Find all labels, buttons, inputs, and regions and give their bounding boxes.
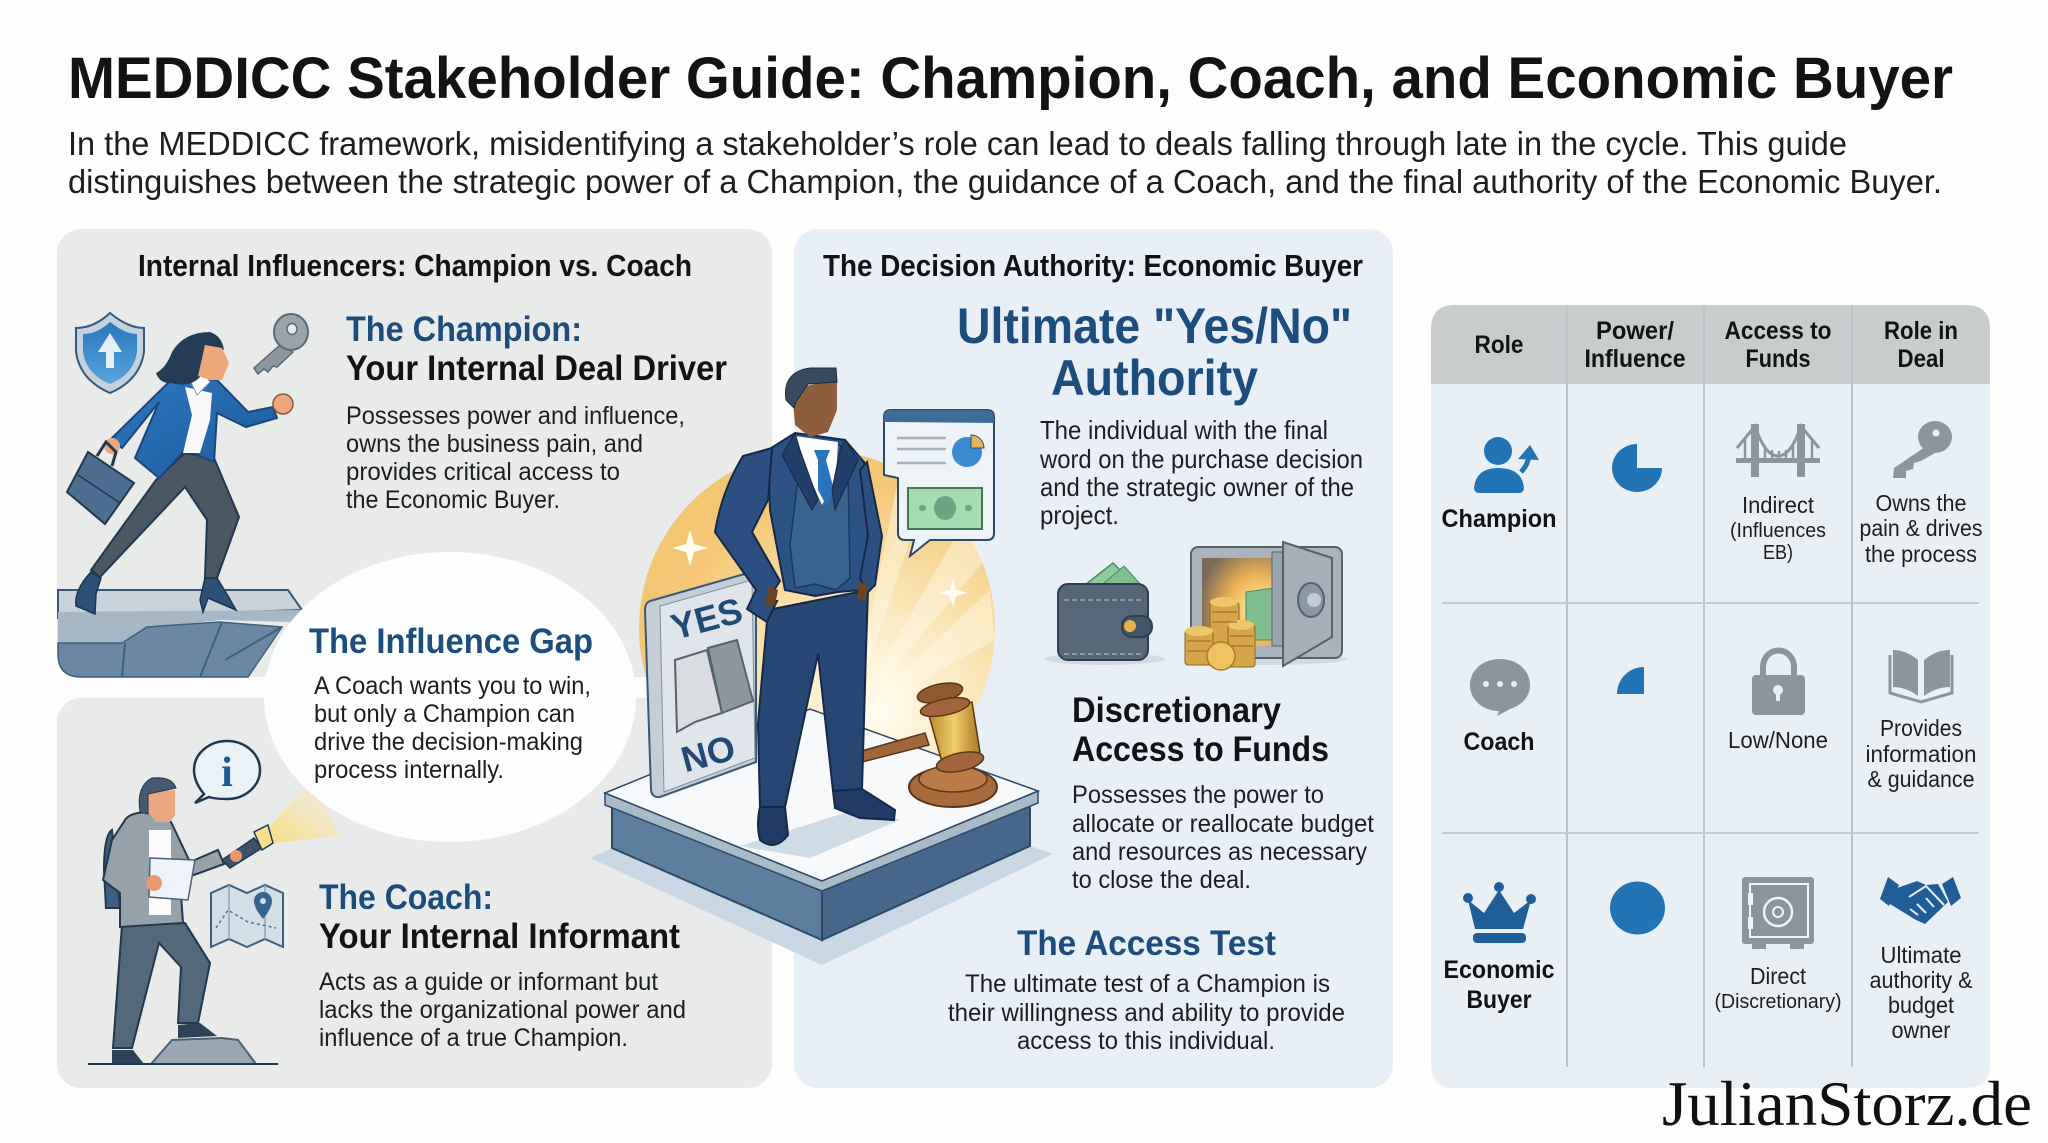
text: provides information: & guidance xyxy=(1868,766,1974,792)
icon: map with pin xyxy=(211,885,283,947)
text: influence gap description xyxy=(314,672,591,784)
icon: champion person with arrow xyxy=(1474,437,1539,493)
text: champion description: owns the business pain, and xyxy=(346,430,643,458)
heading: ultimate authority xyxy=(957,298,1352,406)
icon: key xyxy=(254,314,308,374)
intro text xyxy=(68,125,1942,200)
icon: padlock xyxy=(1752,650,1805,715)
heading: influence gap: The Influence Gap xyxy=(309,622,593,661)
text: champion description: provides critical access to xyxy=(346,458,620,486)
icon: safe xyxy=(1742,877,1814,949)
text: ultimate authority: authority & xyxy=(1870,967,1972,993)
icon: shield with arrow xyxy=(76,313,144,393)
text: coach description: influence of a true Champion. xyxy=(319,1024,628,1052)
yes/no switch panel: YES xyxy=(667,589,747,648)
icon: coach chat bubble xyxy=(1470,659,1530,716)
text: provides information xyxy=(1866,715,1976,792)
text: owns the pain xyxy=(1860,490,1982,567)
text: access test description: access to this individual. xyxy=(1017,1027,1275,1055)
illustration: coach figure xyxy=(103,778,273,1064)
icon: bridge xyxy=(1736,424,1820,477)
text: authority description: word on the purchase decision xyxy=(1039,444,1363,474)
text: champion description: Possesses power and influence, xyxy=(346,402,685,430)
intro text: In the MEDDICC framework, misidentifying a stakeholder’s role can lead to deals falling through late in the cycle. This guide xyxy=(68,125,1847,162)
illustration: economic buyer on platform xyxy=(590,368,1053,965)
table body xyxy=(1431,384,1990,1088)
text: owns the pain: pain & drives xyxy=(1860,515,1982,541)
table header: Access to xyxy=(1724,317,1832,345)
role label: champion: Champion xyxy=(1442,505,1556,533)
text: influence gap description: drive the decision-making xyxy=(314,728,583,756)
ground line xyxy=(88,1063,278,1065)
text: champion description: the Economic Buyer. xyxy=(346,486,560,514)
text: influence gap description: but only a Champion can xyxy=(314,700,575,728)
table header: Role in xyxy=(1884,317,1958,345)
text: funds description xyxy=(1072,781,1374,894)
text: owns the pain: Owns the xyxy=(1876,490,1966,516)
text: provides information: Provides xyxy=(1880,715,1962,741)
text: ultimate authority: Ultimate xyxy=(1880,942,1962,968)
text: influence gap description: A Coach wants you to win, xyxy=(314,672,591,700)
panel heading: internal influencers: Internal Influencers: Champion vs. Coach xyxy=(138,248,692,283)
illustration: cliff ledge xyxy=(58,590,302,677)
text: access test description: The ultimate test of a Champion is xyxy=(965,970,1330,998)
text: champion description xyxy=(346,402,685,514)
watermark: JulianStorz.de xyxy=(1662,1068,2032,1139)
text: ultimate authority: owner xyxy=(1892,1017,1951,1043)
text: direct xyxy=(1714,963,1842,1013)
chart: quarter pie xyxy=(1617,667,1644,694)
heading: the champion: Your Internal Deal Driver xyxy=(346,349,727,388)
text: ultimate authority: budget xyxy=(1888,992,1955,1018)
text: provides information: information xyxy=(1866,741,1976,767)
text: indirect: (Influences xyxy=(1730,520,1826,542)
text: indirect xyxy=(1730,492,1826,564)
heading: the coach xyxy=(319,878,680,956)
heading: the champion xyxy=(346,310,727,388)
role label: coach: Coach xyxy=(1464,728,1534,756)
heading: the champion: The Champion: xyxy=(346,310,582,349)
text: authority description: and the strategic owner of the xyxy=(1040,472,1354,502)
platform xyxy=(590,709,1053,965)
table header: Power/ xyxy=(1596,317,1674,345)
heading: discretionary access xyxy=(1072,691,1329,769)
icon: key xyxy=(1893,421,1952,478)
heading: discretionary access: Access to Funds xyxy=(1072,730,1329,769)
yes/no switch panel: NO xyxy=(677,727,740,780)
text: authority description: The individual with the final xyxy=(1040,415,1328,445)
role label: economic buyer xyxy=(1444,956,1555,1014)
text: funds description: allocate or reallocate budget xyxy=(1072,810,1374,838)
icon: open book xyxy=(1890,650,1952,702)
text: low/none: Low/None xyxy=(1728,727,1828,753)
heading: discretionary access: Discretionary xyxy=(1072,691,1281,730)
right arm xyxy=(860,462,882,593)
icon: wallet xyxy=(1045,563,1165,665)
table header: Influence xyxy=(1584,345,1686,373)
yes/no switch panel xyxy=(645,573,756,797)
text: funds description: to close the deal. xyxy=(1072,866,1251,894)
heading: ultimate authority: Ultimate "Yes/No" xyxy=(957,298,1352,354)
text: access test description xyxy=(948,970,1345,1055)
text: coach description: lacks the organizational power and xyxy=(319,996,686,1024)
panel: coach xyxy=(57,698,772,1088)
text: coach description: Acts as a guide or informant but xyxy=(319,968,658,996)
table header xyxy=(1431,305,1990,384)
text: indirect: EB) xyxy=(1763,542,1793,564)
text: direct: (Discretionary) xyxy=(1714,991,1842,1013)
role label: economic buyer: Economic xyxy=(1444,956,1555,984)
intro text: distinguishes between the strategic power of a Champion, the guidance of a Coach, and the final authority of the Economic Buyer. xyxy=(68,163,1942,200)
text: indirect: Indirect xyxy=(1742,492,1815,518)
chart: full circle xyxy=(1610,882,1665,934)
icon: open safe with coins xyxy=(1183,542,1347,670)
jacket torso xyxy=(768,433,868,596)
text: access test description: their willingness and ability to provide xyxy=(948,999,1345,1027)
text: ultimate authority xyxy=(1870,942,1972,1043)
text: coach description xyxy=(319,968,686,1052)
heading: the coach: The Coach: xyxy=(319,878,493,917)
icon: report speech card xyxy=(884,410,994,556)
left arm akimbo xyxy=(715,448,780,622)
icon: info speech bubble: i xyxy=(221,750,233,796)
golden glow xyxy=(639,450,995,806)
text: authority description xyxy=(1039,415,1363,530)
text: owns the pain: the process xyxy=(1865,541,1977,567)
flashlight beam xyxy=(270,780,340,843)
panel: decision authority xyxy=(794,229,1393,1088)
panel: champion xyxy=(57,229,772,677)
heading: ultimate authority: Authority xyxy=(1051,350,1258,406)
chart: three-quarter pie xyxy=(1612,444,1662,492)
heading: the access test: The Access Test xyxy=(1017,924,1276,963)
illustration: champion figure xyxy=(67,332,293,614)
title: MEDDICC Stakeholder Guide: Champion, Coach, and Economic Buyer xyxy=(68,46,1953,111)
callout: the influence gap xyxy=(264,552,636,842)
text: funds description: and resources as necessary xyxy=(1072,838,1367,866)
heading: the coach: Your Internal Informant xyxy=(319,917,680,956)
economic buyer figure xyxy=(715,368,895,845)
table header: Funds xyxy=(1746,345,1810,373)
text: authority description: project. xyxy=(1040,500,1119,530)
table header: Deal xyxy=(1898,345,1944,373)
role label: economic buyer: Buyer xyxy=(1466,986,1532,1014)
text: funds description: Possesses the power to xyxy=(1072,781,1324,809)
panel heading: decision authority: The Decision Authority: Economic Buyer xyxy=(823,248,1363,283)
text: influence gap description: process internally. xyxy=(314,756,504,784)
text: direct: Direct xyxy=(1750,963,1807,989)
comparison table xyxy=(1431,305,1990,1088)
icon: info speech bubble xyxy=(194,741,260,803)
icon: crown xyxy=(1463,882,1536,943)
gavel xyxy=(858,679,997,807)
icon: handshake xyxy=(1880,877,1961,924)
table header: Role xyxy=(1474,331,1524,359)
